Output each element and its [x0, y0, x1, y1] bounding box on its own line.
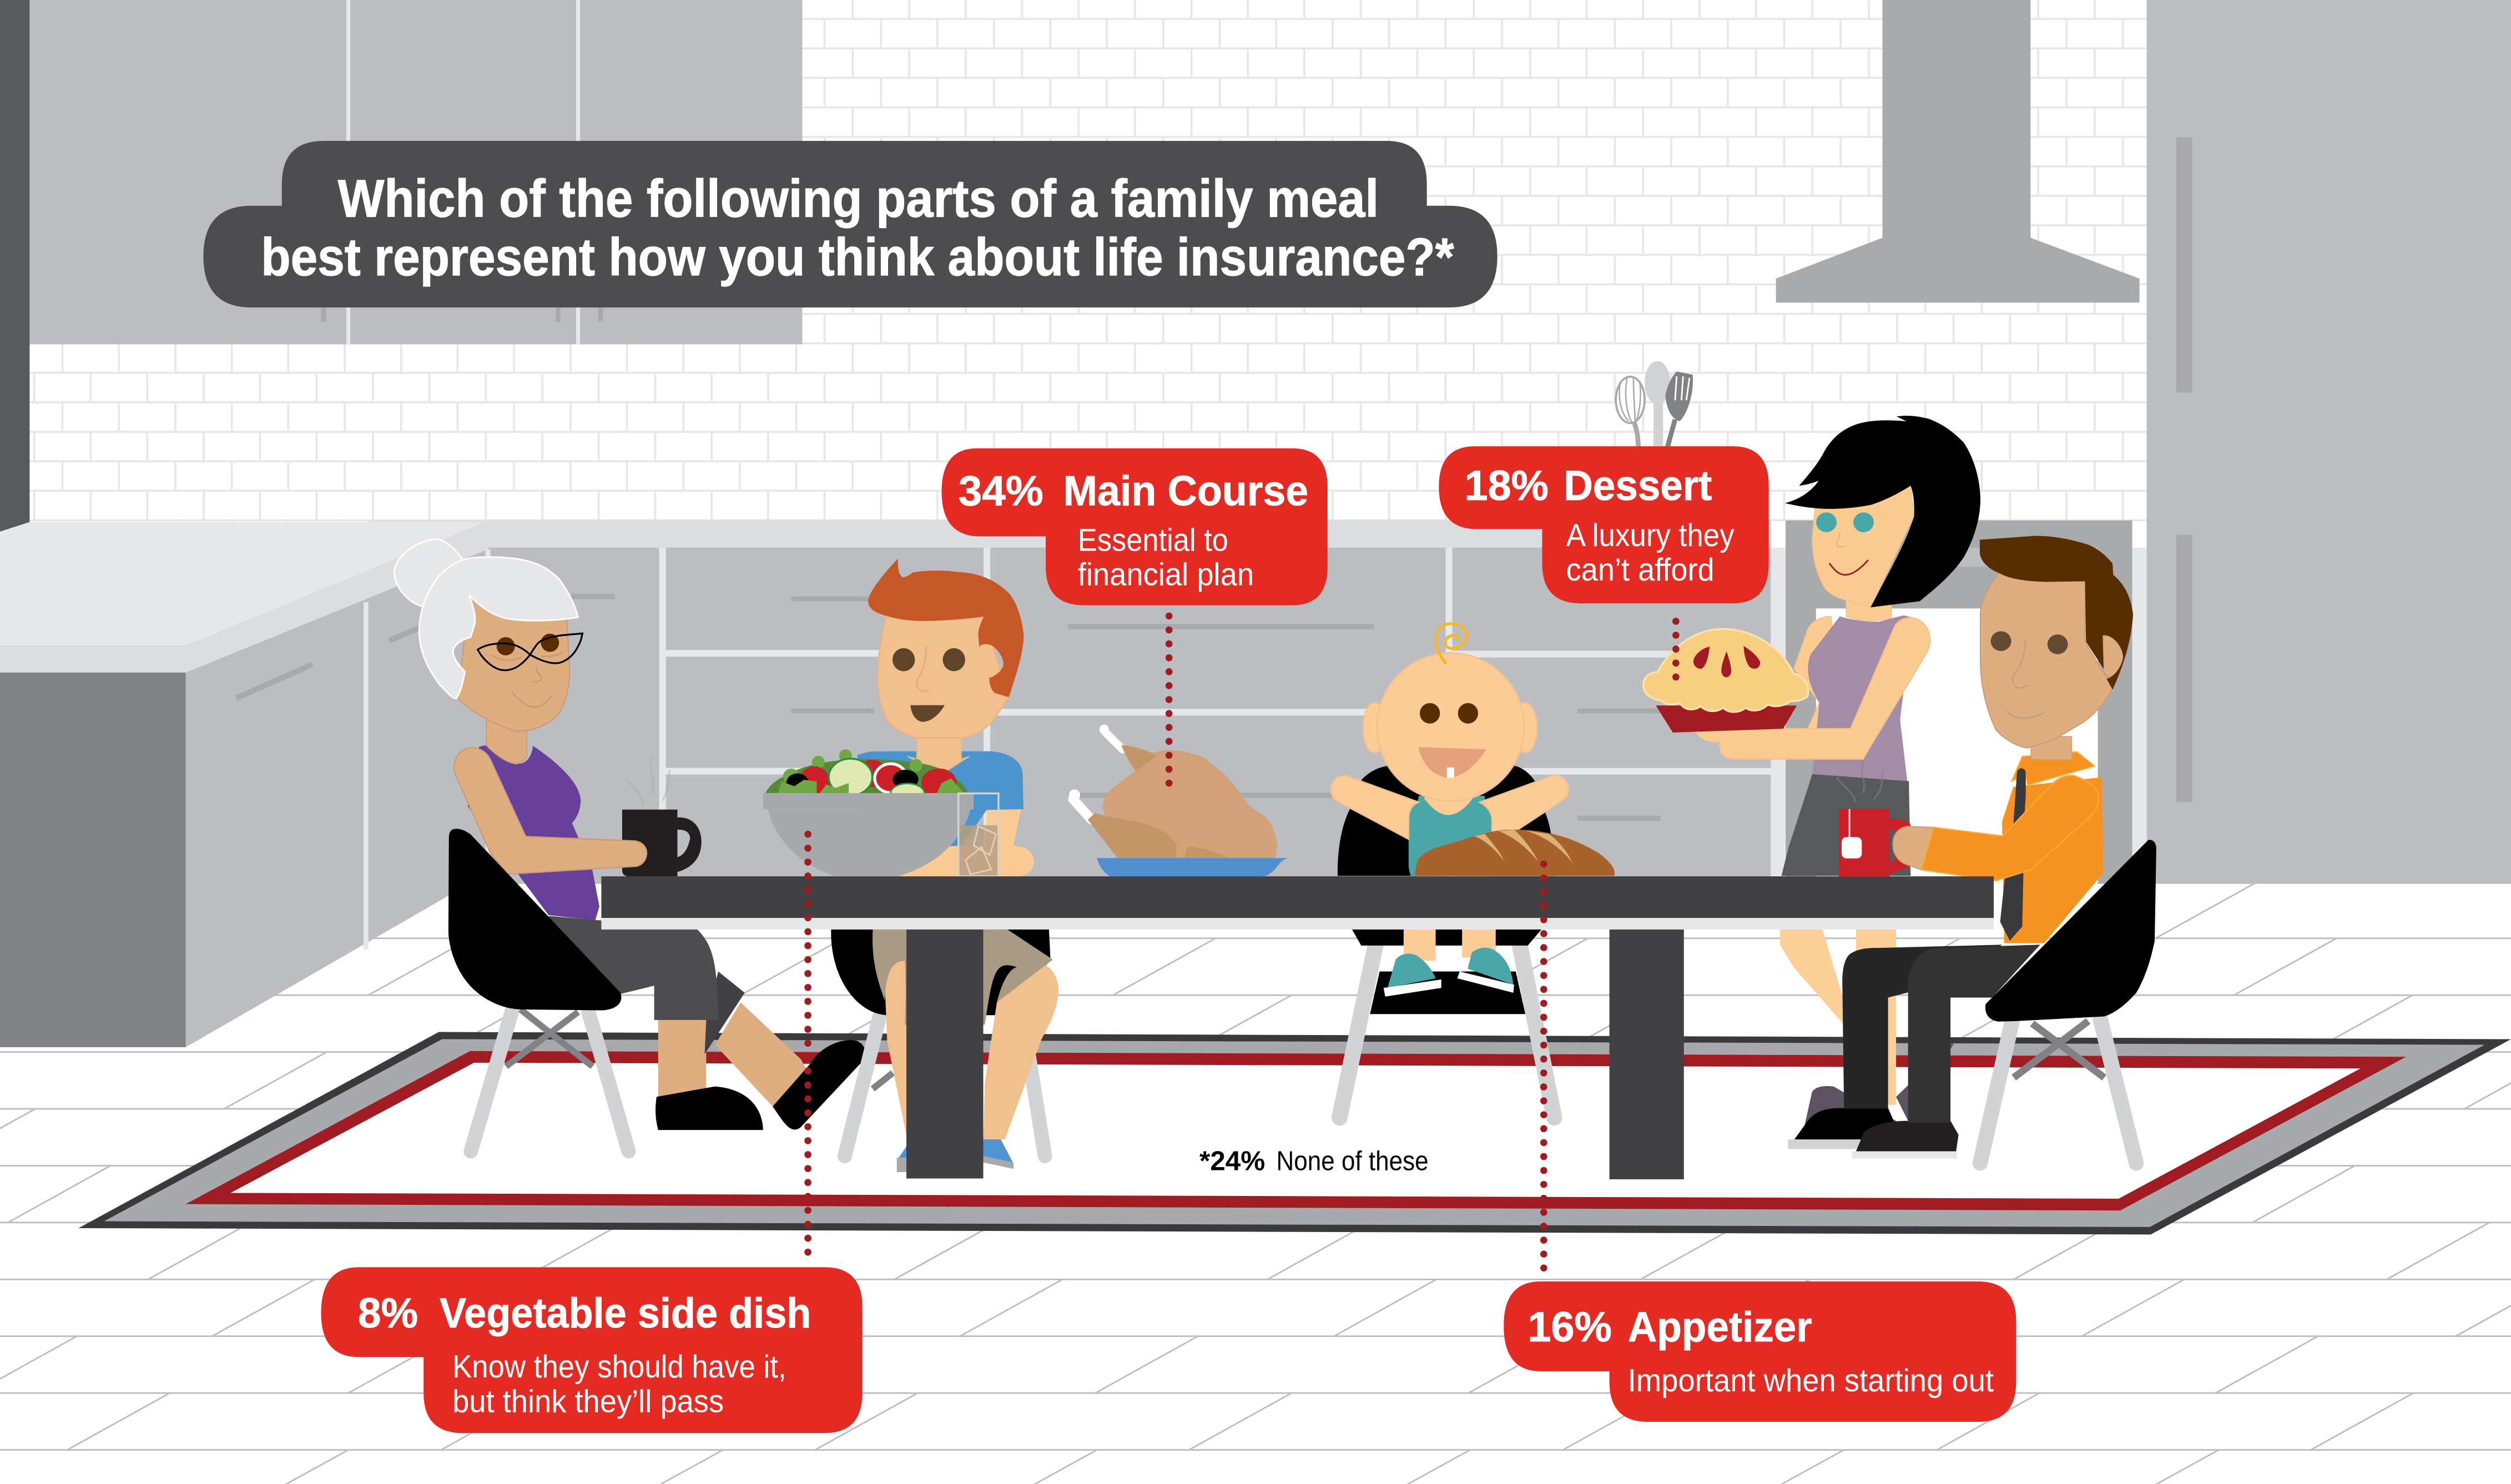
brick wall — [29, 0, 2147, 522]
fridge — [2147, 0, 2511, 884]
person: grandmother — [394, 539, 865, 1130]
mother nose — [1837, 532, 1845, 547]
boy torso — [857, 751, 1023, 846]
callout: dessert: can’t afford — [1566, 552, 1715, 588]
mother smile — [1829, 560, 1868, 575]
father shirt — [2002, 777, 2104, 943]
mother right arm — [1720, 618, 1930, 759]
person: father — [1788, 536, 2133, 1158]
baby neck — [1424, 797, 1473, 815]
baby arms — [1331, 776, 1419, 839]
footnote: *24% — [1199, 1147, 1265, 1177]
callout: dessert: 18% — [1465, 462, 1549, 509]
salad bowl — [763, 749, 974, 876]
baby shoes — [1384, 948, 1514, 997]
boy shoes — [897, 1137, 1013, 1163]
oven alcove — [1786, 521, 2147, 884]
floor — [0, 881, 2511, 1484]
callout: main course — [942, 448, 1328, 605]
father collar — [2011, 752, 2095, 785]
grandmother glasses — [478, 633, 582, 670]
callout: vegetable side dish: 8% — [358, 1290, 418, 1337]
left wall strip — [0, 0, 29, 532]
callout: vegetable side dish: Vegetable side dish — [440, 1290, 811, 1337]
boy nose — [917, 645, 929, 691]
upper cabinets — [29, 0, 802, 344]
grandmother legs — [548, 916, 865, 1130]
boy neck — [907, 729, 970, 776]
callout: appetizer — [1504, 1281, 2016, 1422]
mother legs — [1780, 928, 1896, 1105]
title text: best represent how you think about life insurance?* — [261, 228, 1454, 287]
rug — [78, 1032, 2511, 1234]
callout: appetizer: 16% — [1527, 1304, 1612, 1351]
callout: vegetable side dish — [321, 1267, 863, 1433]
grandmother eyes — [497, 634, 559, 655]
baby legs — [1404, 928, 1496, 961]
boy hair — [868, 558, 1024, 697]
footnote: None of these — [1277, 1147, 1429, 1177]
father tie — [2000, 768, 2026, 941]
callout: vegetable side dish: Know they should have it, — [452, 1349, 786, 1385]
callout: main course: Essential to — [1078, 523, 1228, 558]
father sleeve — [1922, 775, 2099, 881]
boy arm — [898, 809, 1034, 876]
mother eyes — [1816, 512, 1874, 532]
dotted leader: dessert — [1675, 621, 1677, 677]
person: mother — [1720, 416, 1980, 1147]
water glass — [959, 794, 999, 876]
mother hair — [1785, 416, 1980, 607]
father hand — [1893, 826, 1934, 870]
grandmother face details — [492, 653, 562, 707]
callout: main course: Main Course — [1063, 468, 1308, 515]
father head — [1980, 573, 2112, 748]
title bubble — [203, 141, 1497, 307]
grandmother head — [458, 595, 569, 731]
boy head — [878, 617, 1009, 738]
father neck — [2031, 736, 2072, 760]
callout: dessert — [1439, 446, 1769, 603]
baby head — [1363, 703, 1386, 753]
table — [601, 876, 1994, 1179]
baby eyes — [1420, 703, 1478, 724]
baby body — [1409, 796, 1492, 876]
baby hair curl — [1436, 624, 1467, 663]
father shoes — [1794, 1108, 1894, 1140]
callout: dessert: A luxury they — [1566, 518, 1734, 553]
roast turkey — [1069, 725, 1288, 876]
boy eyes — [893, 648, 965, 671]
grandmother mug — [622, 756, 702, 876]
mother left arm — [1794, 617, 1834, 729]
boy mouth — [910, 705, 945, 722]
icon: kitchen utensils — [1616, 361, 1693, 448]
grandmother chair — [448, 829, 628, 1151]
mother head — [1812, 485, 1914, 607]
dotted leader: main course — [1168, 616, 1170, 788]
mug: father — [1836, 761, 1910, 876]
mother shoes — [1800, 1086, 1896, 1147]
title text — [261, 169, 1454, 287]
father chair — [1980, 840, 2156, 1163]
bread loaf — [1415, 830, 1615, 876]
callout: main course: 34% — [959, 468, 1043, 515]
grandmother arm — [454, 748, 647, 874]
left counter — [0, 522, 488, 1047]
mother top — [1808, 615, 1914, 781]
callout: vegetable side dish: but think they’ll pass — [452, 1384, 724, 1420]
grandmother torso — [468, 745, 599, 920]
boy legs — [984, 962, 1058, 1139]
person: boy — [831, 558, 1058, 1172]
father eyes — [1991, 631, 2068, 654]
father legs — [1842, 945, 2002, 1109]
dotted leader: appetizer — [1542, 864, 1545, 1270]
callout: appetizer: Appetizer — [1628, 1304, 1812, 1351]
range hood — [1776, 0, 2140, 302]
baby mouth — [1418, 747, 1486, 778]
person: baby — [1331, 624, 1569, 1118]
father hair — [1980, 536, 2133, 690]
title text: Which of the following parts of a family meal — [338, 169, 1379, 228]
father ear — [2102, 635, 2123, 677]
callout: main course: financial plan — [1078, 557, 1254, 593]
dotted leader: vegetable — [806, 834, 809, 1265]
grandmother hair — [394, 539, 463, 607]
mother neck — [1846, 595, 1891, 620]
grandmother neck — [486, 720, 527, 764]
baby chair — [1338, 766, 1555, 1118]
boy chair — [831, 928, 1051, 1156]
callout: appetizer: Important when starting out — [1628, 1363, 1994, 1399]
father face details — [2005, 640, 2045, 718]
base cabinets — [369, 521, 1785, 884]
mother skirt — [1781, 774, 1910, 876]
footnote — [1199, 1147, 1429, 1177]
pie — [1643, 629, 1808, 742]
callout: dessert: Dessert — [1564, 462, 1712, 509]
